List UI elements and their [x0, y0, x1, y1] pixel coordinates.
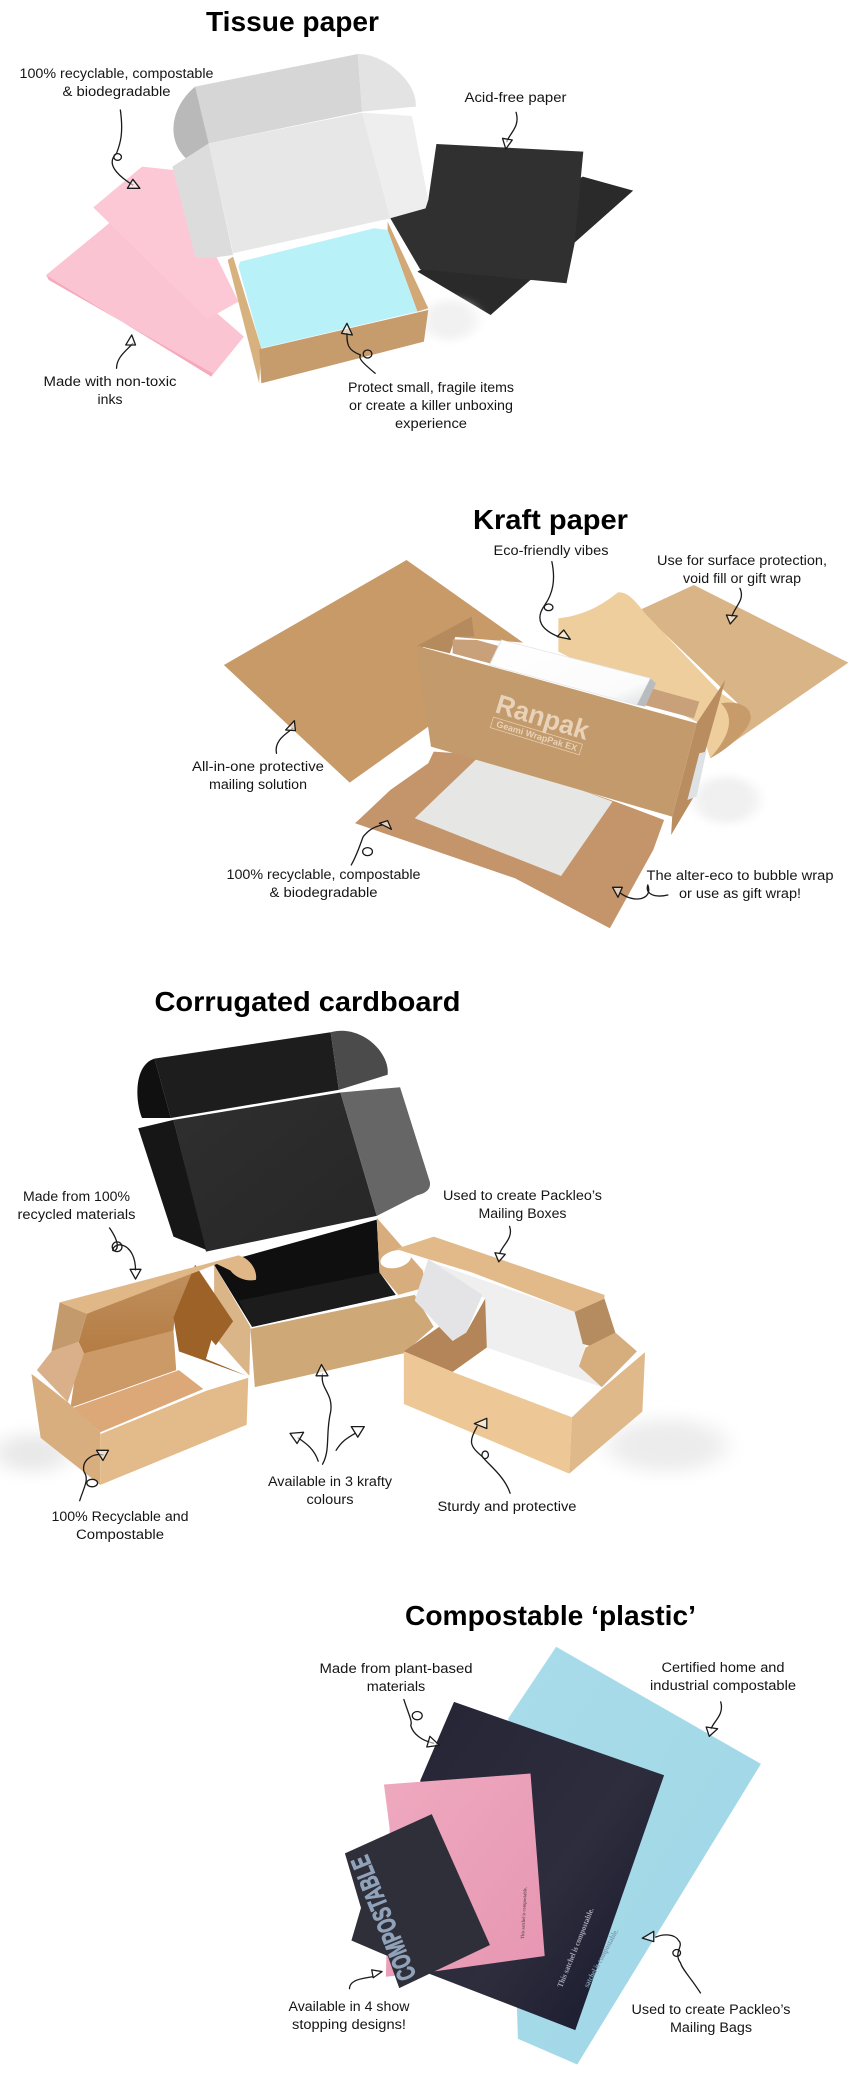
label: recyclable: & biodegradable	[270, 885, 378, 900]
label: non-toxic inks: inks	[98, 392, 123, 407]
label: mailing boxes: Mailing Boxes	[478, 1206, 567, 1221]
label: mailing boxes	[443, 1188, 602, 1221]
label: four designs: Available in 4 show	[288, 1999, 410, 2014]
label: protective mailing	[192, 759, 324, 792]
label: protect small items: experience	[395, 416, 467, 431]
photo: compostable mailing bags	[345, 1647, 761, 2065]
label: recyclable	[20, 66, 213, 99]
label: recycled materials: recycled materials	[18, 1207, 136, 1222]
label: three colours	[268, 1474, 392, 1507]
bag print: navy satchel: This satchel is compostable.	[556, 1907, 596, 1989]
label: non-toxic inks: Made with non-toxic	[44, 374, 177, 389]
icon: arrow to blue tissue	[342, 323, 375, 373]
heading: kraft paper: Kraft paper	[473, 504, 628, 535]
label: mailing boxes: Used to create Packleo’s	[443, 1188, 602, 1203]
icon: three colour arrows	[290, 1365, 364, 1464]
blue bag	[508, 1647, 761, 2065]
icon: arrow to right box lid	[495, 1226, 510, 1262]
icon: arrow to left box front	[80, 1450, 108, 1501]
label: protect small items: or create a killer unboxing	[349, 398, 513, 413]
label: recyclable	[226, 867, 420, 900]
panel: tissue paper	[20, 6, 633, 431]
white tissue sheet	[415, 753, 613, 876]
icon: arrow to black tissue	[503, 112, 517, 149]
label: mailing bags: Mailing Bags	[670, 2020, 752, 2035]
honeycomb kraft wrap	[355, 752, 664, 928]
icon: arrow to pink tissue	[112, 110, 140, 188]
icon: arrow to honeycomb	[351, 821, 391, 865]
black tissue sheets	[390, 144, 633, 315]
heading: corrugated cardboard: Corrugated cardboard	[154, 986, 460, 1017]
Ranpak print on dispenser: Geami WrapPak EX	[495, 719, 578, 753]
open white box lid	[172, 54, 428, 258]
label: plant-based: Made from plant-based	[320, 1661, 472, 1676]
label: protect small items	[348, 380, 514, 431]
label: plant-based: materials	[367, 1679, 426, 1694]
icon: arrow to small bag	[350, 1970, 382, 1989]
navy bag	[420, 1702, 664, 2030]
photo: three mailing boxes	[0, 1031, 726, 1485]
label: recycled materials	[18, 1189, 136, 1222]
label: surface protection: void fill or gift wrap	[683, 571, 801, 586]
floor shadows	[0, 1419, 726, 1472]
pink tissue sheets	[46, 143, 244, 377]
label: recyclable and compostable: 100% Recyclable and	[52, 1509, 188, 1524]
label: mailing bags	[632, 2002, 791, 2035]
label: non-toxic inks	[44, 374, 177, 407]
label: protective mailing: All-in-one protective	[192, 759, 324, 774]
pink bag	[384, 1774, 545, 1977]
icon: arrow to navy bag	[404, 1699, 439, 1747]
icon: arrow to wrap edge	[613, 885, 668, 899]
label: recyclable: 100% recyclable, compostable	[226, 867, 420, 882]
panel: kraft paper	[192, 504, 848, 928]
photo: kraft mailer, dispenser and honeycomb wrap	[224, 560, 848, 928]
icon: arrow to kraft sheet	[540, 562, 570, 639]
kraft mailer	[224, 560, 523, 783]
label: recyclable: & biodegradable	[62, 84, 170, 99]
icon: arrow to mailing bag	[642, 1931, 700, 1993]
label: three colours: Available in 3 krafty	[268, 1474, 392, 1489]
small dark bag	[345, 1814, 490, 1988]
icon: arrow to mailer	[276, 721, 295, 753]
panel: corrugated cardboard	[0, 986, 726, 1542]
dispenser shadow	[694, 777, 759, 823]
bag print: compostable: COMPOSTABLE	[345, 1851, 422, 1985]
black box	[137, 1031, 434, 1387]
Ranpak print on dispenser: Ranpak	[492, 689, 594, 746]
label: surface protection	[657, 553, 827, 586]
label: surface protection: Use for surface protection,	[657, 553, 827, 568]
icon: arrow to left box	[110, 1228, 141, 1279]
label: alter-eco: or use as gift wrap!	[679, 886, 801, 901]
right kraft box	[396, 1237, 645, 1474]
label: certified	[650, 1660, 796, 1693]
label: four designs	[288, 1999, 410, 2032]
photo: tissue paper sheets and open box	[46, 54, 633, 383]
heading: compostable plastic: Compostable ‘plastic’	[405, 1600, 696, 1631]
shadow under box	[423, 300, 477, 340]
left kraft box	[31, 1255, 256, 1485]
dispenser box	[416, 617, 725, 835]
label: recyclable and compostable	[52, 1509, 188, 1542]
label: acid-free: Acid-free paper	[464, 90, 567, 105]
label: mailing bags: Used to create Packleo’s	[632, 2002, 791, 2017]
bag print: blue satchel: satchel is compostable.	[582, 1927, 620, 1989]
heading: tissue paper: Tissue paper	[206, 6, 379, 37]
label: four designs: stopping designs!	[292, 2017, 406, 2032]
bag print: pink satchel: This satchel is compostable.	[521, 1886, 529, 1939]
label: protective mailing: mailing solution	[209, 777, 307, 792]
label: certified: industrial compostable	[650, 1678, 796, 1693]
label: recycled materials: Made from 100%	[23, 1189, 130, 1204]
label: recyclable: 100% recyclable, compostable	[20, 66, 213, 81]
icon: arrow to lower pink sheet	[117, 335, 136, 368]
icon: arrow to back sheet	[726, 588, 741, 624]
label: three colours: colours	[306, 1492, 354, 1507]
label: plant-based	[320, 1661, 472, 1694]
label: certified: Certified home and	[662, 1660, 784, 1675]
label: eco-friendly: Eco-friendly vibes	[494, 543, 609, 558]
box body with blue tissue	[228, 222, 428, 383]
kraft paper sheets	[558, 585, 848, 758]
label: alter-eco: The alter-eco to bubble wrap	[646, 868, 834, 883]
panel: compostable plastic	[288, 1600, 796, 2065]
icon: arrow to right box front	[471, 1418, 510, 1493]
icon: arrow to blue bag	[706, 1702, 721, 1736]
label: recyclable and compostable: Compostable	[76, 1527, 164, 1542]
label: alter-eco	[646, 868, 834, 901]
label: protect small items: Protect small, fragile items	[348, 380, 514, 395]
label: sturdy: Sturdy and protective	[438, 1499, 576, 1514]
